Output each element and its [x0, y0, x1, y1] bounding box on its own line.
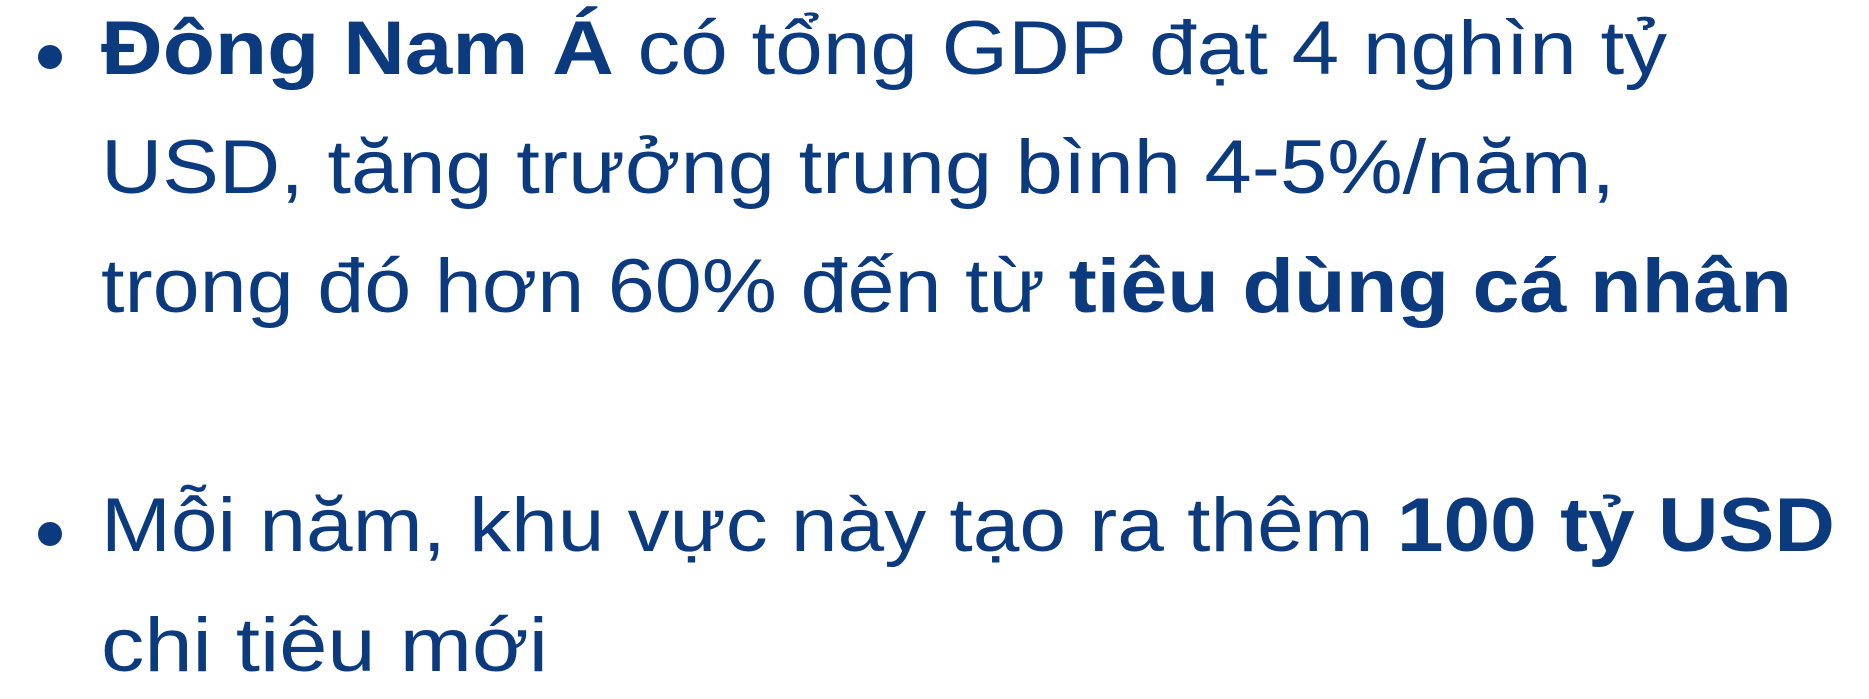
icon: bullet dot 1	[38, 45, 62, 69]
text line 1: Đông Nam Á có tổng GDP đạt 4 nghìn tỷ	[101, 6, 1667, 91]
bullet point 1: GDP of Southeast Asia	[38, 6, 1792, 329]
bullet point 2: new spending per year	[38, 483, 1835, 688]
text line 3: trong đó hơn 60% đến từ tiêu dùng cá nhân	[101, 244, 1792, 329]
icon: bullet dot 2	[38, 522, 62, 546]
text line 2: USD, tăng trưởng trung bình 4-5%/năm,	[101, 125, 1615, 210]
text line 4: Mỗi năm, khu vực này tạo ra thêm 100 tỷ USD	[101, 483, 1835, 568]
text line 5: chi tiêu mới	[101, 603, 548, 688]
